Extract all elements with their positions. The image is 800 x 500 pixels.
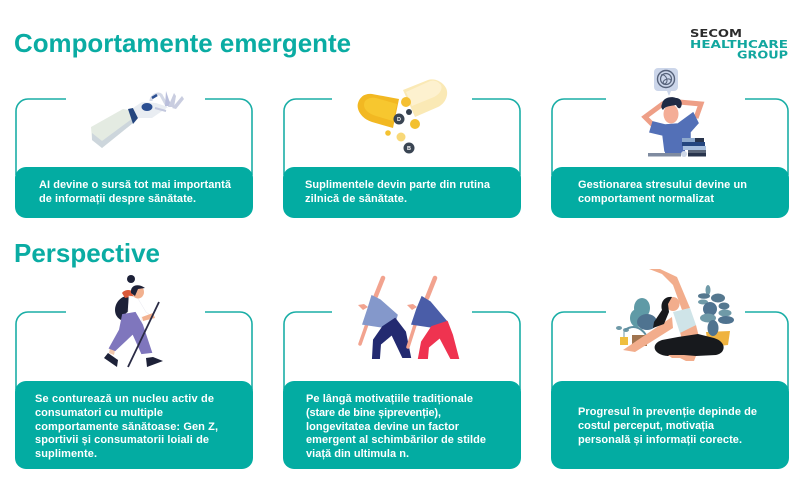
text panel: [551, 381, 789, 469]
text panel: viață din ultimula n.: [306, 448, 409, 460]
text panel: de informații despre sănătate.: [39, 193, 196, 205]
logo: Secom Healthcare Group: HEALTHCARE: [690, 38, 788, 51]
panel: supplements: [283, 79, 521, 218]
text panel: consumatori cu multiple: [35, 407, 163, 419]
icon: stressed person: [645, 68, 706, 157]
text panel: [283, 167, 521, 218]
text panel: longevitatea devine un factor: [306, 421, 460, 433]
text panel: [551, 167, 789, 218]
logo: Secom Healthcare Group: SECOM: [690, 27, 742, 40]
icon: two people stretching: [358, 278, 458, 358]
text panel: personală și informații corecte.: [578, 434, 742, 446]
panel: longevity: [283, 278, 521, 469]
text panel: comportamente sănătoase: Gen Z,: [35, 421, 218, 433]
text panel: Progresul în prevenție depinde de: [578, 406, 757, 418]
heading: Perspective: Perspective: [14, 238, 160, 268]
icon: hiker: [104, 275, 163, 367]
text panel: Suplimentele devin parte din rutina: [305, 179, 491, 191]
text panel: emergent al schimbărilor de stilde: [306, 434, 486, 446]
icon: yoga woman with plants: [616, 269, 734, 361]
text panel: Pe lângă motivațiile tradiționale: [306, 393, 473, 405]
panel: AI: [15, 91, 253, 218]
text panel: zilnică de sănătate.: [305, 193, 407, 205]
text panel: Gestionarea stresului devine un: [578, 179, 747, 191]
icon: capsule: [358, 79, 447, 154]
text panel: [283, 381, 521, 469]
text panel: [15, 167, 253, 218]
text panel: costul perceput, motivația: [578, 420, 715, 432]
icon: capsule: D: [397, 117, 401, 123]
icon: capsule: B: [407, 146, 411, 152]
text panel: suplimente.: [35, 448, 97, 460]
panel: active consumers: [15, 275, 253, 469]
panel: stress: [551, 68, 789, 218]
panel: prevention: [551, 269, 789, 469]
text panel: AI devine o sursă tot mai importantă: [39, 179, 232, 191]
text panel: [15, 381, 253, 469]
logo: Secom Healthcare Group: GROUP: [737, 48, 788, 62]
text panel: Se conturează un nucleu activ de: [35, 393, 214, 405]
text panel: (stare de bine șiprevenție),: [306, 407, 441, 419]
text panel: sportivii și consumatorii loiali de: [35, 434, 209, 446]
text panel: comportament normalizat: [578, 193, 714, 205]
logo: Secom Healthcare Group: [690, 27, 788, 62]
icon: robotic arm: [91, 91, 184, 148]
title: Comportamente emergente: Comportamente emergente: [14, 28, 351, 58]
